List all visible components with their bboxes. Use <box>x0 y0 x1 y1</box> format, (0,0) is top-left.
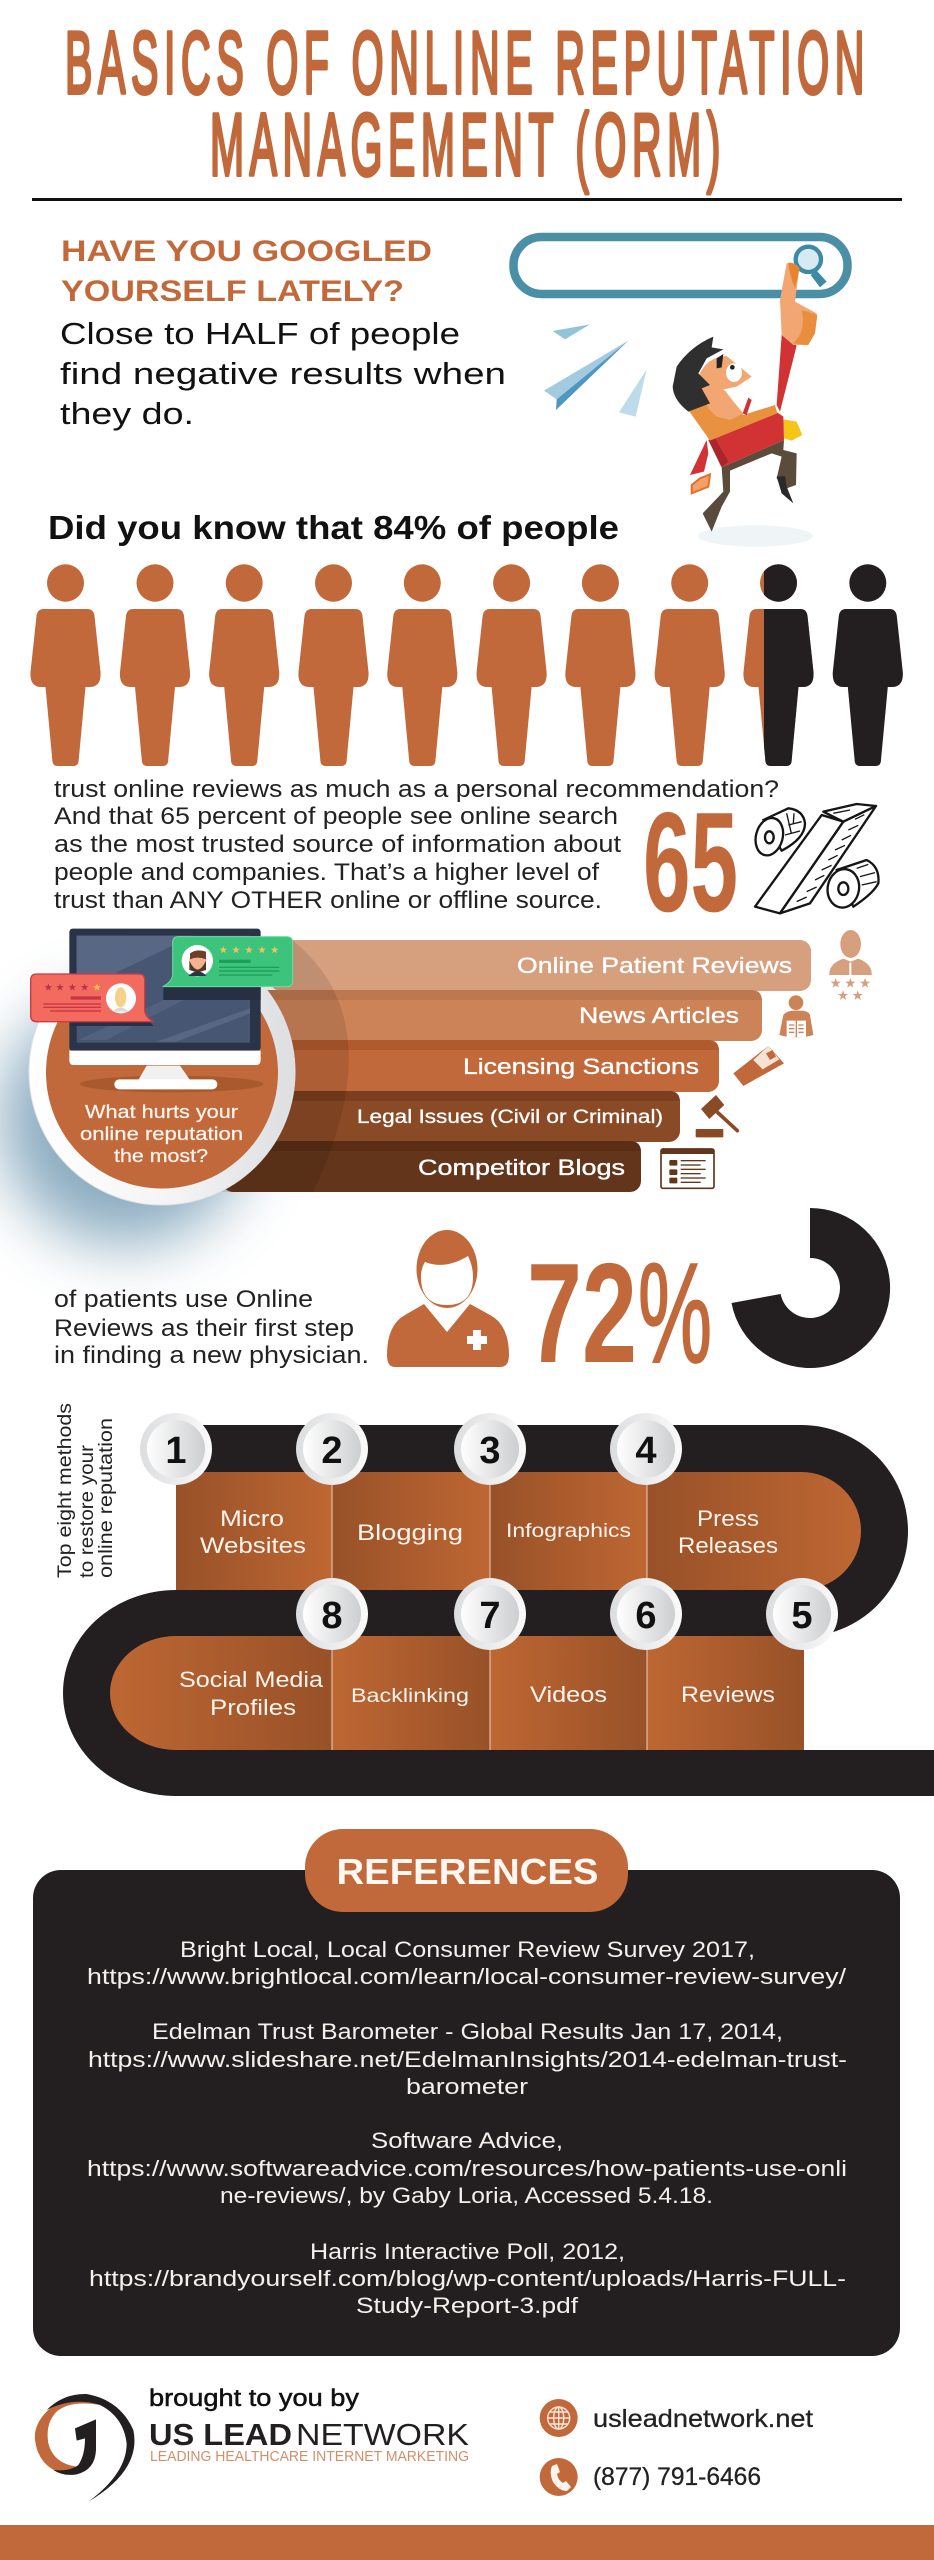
bar: online patient reviews <box>270 940 811 991</box>
reference list: https://brandyourself.com/blog/wp-content/uploads/Harris-FULL- <box>89 2266 846 2291</box>
text: patients use online reviews <box>54 1286 369 1369</box>
text: patients use online reviews: of patients use Online <box>54 1286 313 1313</box>
text: half of people <box>60 316 506 431</box>
bar: online patient reviews: Online Patient Reviews <box>517 953 792 978</box>
icon: gavel <box>696 1095 737 1137</box>
icon: person reading news <box>779 995 813 1037</box>
text: online search trust <box>54 776 779 914</box>
wordmark: us lead network <box>149 2417 469 2465</box>
bar: competitor blogs <box>222 1141 641 1192</box>
stat: 72%: 72 <box>527 1234 637 1393</box>
step labels: Micro <box>220 1506 284 1531</box>
reference list: Software Advice, <box>371 2128 563 2153</box>
numbered circles: 3 <box>479 1430 501 1472</box>
icon: reviewer with stars <box>829 930 872 1000</box>
step labels: Backlinking <box>351 1685 469 1707</box>
text: online search trust: people and companies. That’s a higher level of <box>54 859 599 886</box>
text: top eight methods vertical: to restore your <box>77 1444 98 1578</box>
stat: 72%: % <box>638 1234 712 1393</box>
pictogram: 84 percent of people <box>30 564 903 766</box>
bar: competitor blogs: Competitor Blogs <box>418 1155 625 1180</box>
icon: us lead network logo <box>35 2394 134 2502</box>
step labels: Releases <box>678 1533 778 1558</box>
text: patients use online reviews: Reviews as their first step <box>54 1315 354 1342</box>
step labels: Social Media <box>179 1667 324 1692</box>
step labels: Press <box>697 1506 759 1531</box>
bar: news articles: News Articles <box>579 1003 739 1028</box>
footer bar <box>0 2525 934 2560</box>
heading: have you googled yourself <box>61 235 432 308</box>
icon: blog page <box>661 1149 714 1188</box>
heading: have you googled yourself: YOURSELF LATELY? <box>61 275 404 308</box>
heading: have you googled yourself: HAVE YOU GOOGLED <box>61 235 432 268</box>
step labels: Blogging <box>357 1520 463 1545</box>
text: top eight methods vertical <box>55 1403 117 1578</box>
icon: sketched percent sign <box>752 804 879 913</box>
icon: globe <box>540 2399 578 2437</box>
bar: legal issues <box>230 1091 680 1142</box>
text: phone number: (877) 791-6466 <box>593 2463 761 2491</box>
chart: 72 percent donut <box>732 1208 890 1368</box>
numbered circles <box>140 1413 838 1650</box>
stat: 65: 65 <box>643 783 738 942</box>
bar: legal issues: Legal Issues (Civil or Criminal) <box>357 1107 663 1128</box>
reference list: ne-reviews/, by Gaby Loria, Accessed 5.4.18. <box>220 2183 713 2208</box>
text: online search trust: trust than ANY OTHER online or offline source. <box>54 887 602 914</box>
step labels: Infographics <box>506 1520 631 1542</box>
heading: references pill: REFERENCES <box>336 1851 598 1892</box>
text: half of people: they do. <box>60 396 194 431</box>
text: top eight methods vertical: Top eight methods <box>55 1403 76 1578</box>
reference list <box>87 1937 847 2318</box>
text: brought to you by: brought to you by <box>149 2385 359 2412</box>
step labels: Profiles <box>210 1695 296 1720</box>
text: online search trust: And that 65 percent of people see online search <box>54 803 618 830</box>
numbered circles: 8 <box>321 1595 343 1637</box>
text: half of people: Close to HALF of people <box>60 316 460 351</box>
step cells <box>110 1472 861 1750</box>
icon: phone <box>540 2458 578 2496</box>
step labels: Reviews <box>681 1682 775 1707</box>
title <box>65 13 870 194</box>
text: website: usleadnetwork.net <box>593 2405 813 2433</box>
reference list: Edelman Trust Barometer - Global Results Jan 17, 2014, <box>152 2019 783 2044</box>
illustration: man pressing search <box>544 247 827 547</box>
bar: news articles <box>240 990 762 1041</box>
text: what hurts your online reputation: online reputation <box>80 1123 243 1144</box>
wordmark: us lead network: LEADING HEALTHCARE INTERNET MARKETING <box>150 2448 469 2465</box>
panel: monitor circle <box>29 929 295 1205</box>
reference list: https://www.brightlocal.com/learn/local-consumer-review-survey/ <box>87 1964 847 1989</box>
wordmark: us lead network: US LEAD <box>149 2417 292 2452</box>
bar: licensing sanctions <box>240 1040 719 1092</box>
text: half of people: find negative results when <box>60 356 506 391</box>
chart: eight step road <box>63 1413 934 1796</box>
icon: doctor <box>387 1230 509 1367</box>
icon: search bar <box>514 237 848 294</box>
numbered circles: 7 <box>479 1595 501 1637</box>
reference list: Harris Interactive Poll, 2012, <box>310 2239 625 2264</box>
reference list: Bright Local, Local Consumer Review Survey 2017, <box>180 1937 755 1962</box>
text: what hurts your online reputation: What hurts your <box>85 1101 238 1122</box>
shadow behind circle <box>0 995 250 1245</box>
text: what hurts your online reputation: the most? <box>114 1145 208 1166</box>
numbered circles: 5 <box>791 1595 813 1637</box>
step labels <box>179 1506 778 1720</box>
chart: ranked bars <box>222 940 811 1192</box>
illustration: monitor with review bubbles <box>31 929 293 1092</box>
wordmark: us lead network: NETWORK <box>296 2417 469 2452</box>
icons: bar icons <box>661 930 872 1188</box>
reference list: Study-Report-3.pdf <box>356 2293 579 2318</box>
numbered circles: 2 <box>321 1430 343 1472</box>
text: top eight methods vertical: online reputation <box>96 1418 117 1578</box>
reference list: barometer <box>406 2074 528 2099</box>
text: online search trust: as the most trusted source of information about <box>54 831 621 858</box>
numbered circles: 1 <box>165 1430 187 1472</box>
step labels: Websites <box>200 1533 306 1558</box>
text: patients use online reviews: in finding a new physician. <box>54 1342 369 1369</box>
reference list: https://www.slideshare.net/EdelmanInsights/2014-edelman-trust- <box>88 2047 847 2072</box>
reference list: https://www.softwareadvice.com/resources/how-patients-use-onli <box>87 2156 847 2181</box>
icon: license <box>733 1046 784 1086</box>
text: online search trust: trust online reviews as much as a personal recommendation? <box>54 776 779 803</box>
step labels: Videos <box>530 1682 607 1707</box>
numbered circles: 6 <box>635 1595 657 1637</box>
heading: did you know: Did you know that 84% of people <box>48 509 619 546</box>
bar: licensing sanctions: Licensing Sanctions <box>463 1054 699 1079</box>
heading: references pill <box>305 1829 628 1912</box>
text: what hurts your online reputation <box>80 1101 243 1166</box>
panel: references <box>33 1829 900 2356</box>
numbered circles: 4 <box>635 1430 657 1472</box>
